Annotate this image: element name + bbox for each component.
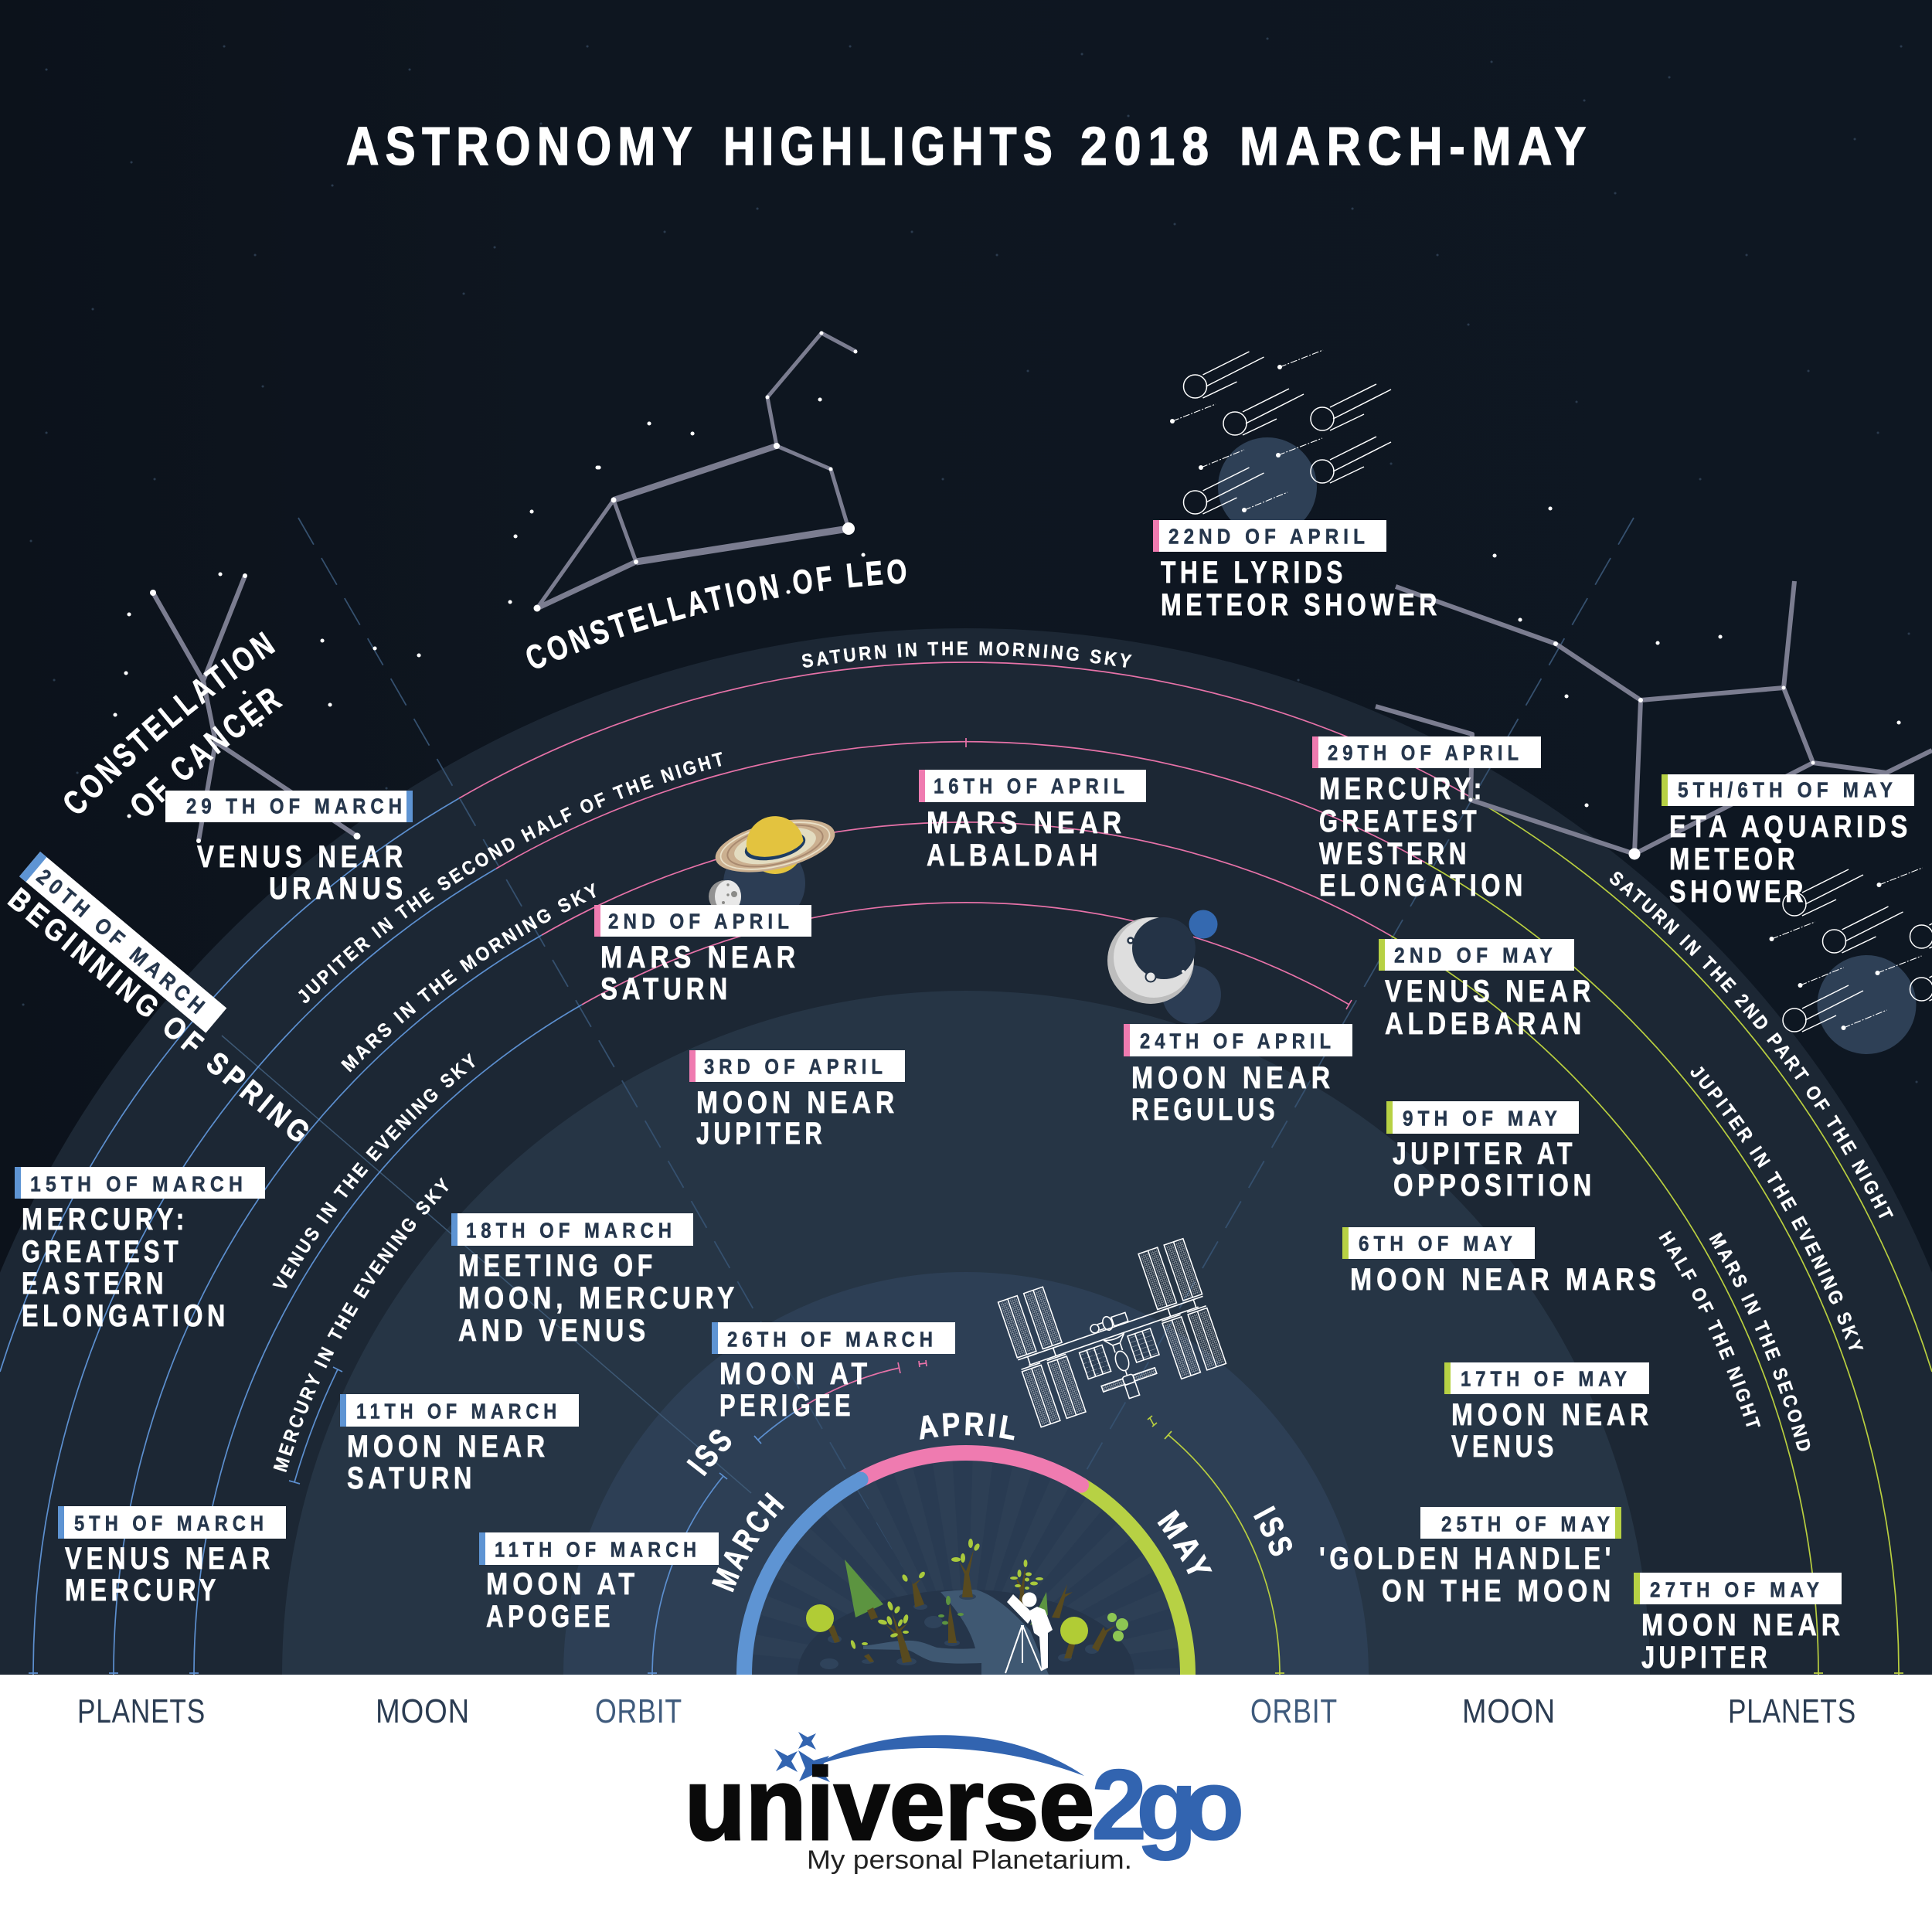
event: 25 May Golden Handle: ON THE MOON — [1382, 1574, 1615, 1608]
April segment — [861, 1453, 1081, 1485]
event: 9 May Jupiter at opposition: OPPOSITION — [1393, 1168, 1596, 1202]
legend: orbit categories: PLANETS — [1728, 1692, 1856, 1730]
white footer panel — [0, 1675, 1932, 1932]
sky rays — [859, 1568, 1073, 1675]
event: 15 March Mercury elongation: GREATEST — [22, 1235, 182, 1269]
event: 24 April Moon near Regulus: 24TH OF APRIL — [1140, 1029, 1335, 1053]
event: 17 May Moon near Venus — [1444, 1362, 1653, 1464]
legend: orbit categories — [77, 1692, 1856, 1730]
icon: International Space Station — [998, 1239, 1226, 1429]
radial dashed season lines — [298, 518, 1634, 1567]
round tree and berry tree — [1060, 1617, 1088, 1645]
curved planet visibility labels: JUPITER IN THE SECOND HALF OF THE NIGHT — [298, 751, 722, 1003]
event: 27 May Moon near Jupiter: MOON NEAR — [1641, 1608, 1845, 1642]
event: 2 May Venus near Aldebaran: 2ND OF MAY — [1394, 943, 1557, 968]
event: 9 May Jupiter at opposition: JUPITER AT — [1393, 1137, 1577, 1171]
event: 3 April Moon near Jupiter: 3RD OF APRIL — [704, 1054, 887, 1079]
event: 3 April Moon near Jupiter: MOON NEAR — [696, 1086, 899, 1120]
logo: universe2go — [685, 1732, 1244, 1875]
title: 2018 — [1080, 116, 1216, 176]
event: 15 March Mercury elongation: EASTERN — [22, 1267, 168, 1301]
radial line: beginning of spring — [222, 1036, 751, 1493]
event: 29 April Mercury western elongation: ELONGATION — [1319, 869, 1527, 903]
event: 11 March Moon near Saturn: 11TH OF MARCH — [356, 1399, 561, 1423]
month labels — [711, 1413, 1213, 1592]
event: 26 March Moon at perigee — [712, 1322, 955, 1423]
event: 3 April Moon near Jupiter — [689, 1050, 905, 1151]
central modules — [1104, 1333, 1138, 1379]
event: 5/6 May Eta Aquarids — [1662, 774, 1914, 909]
event: 15 March Mercury elongation — [15, 1167, 265, 1333]
event: 2 May Venus near Aldebaran: VENUS NEAR — [1385, 975, 1595, 1009]
event: 2 May Venus near Aldebaran: ALDEBARAN — [1385, 1007, 1586, 1041]
month arc — [744, 1453, 1188, 1675]
event: 24 April Moon near Regulus — [1124, 1024, 1352, 1127]
hill — [798, 1590, 1134, 1675]
event: 11 March Moon near Saturn: SATURN — [347, 1461, 476, 1495]
constellation of Leo — [533, 331, 858, 612]
event: 29 March Venus near Uranus: 29 TH OF MARCH — [186, 794, 406, 818]
event: 6 May Moon near Mars — [1342, 1227, 1661, 1297]
curved planet visibility labels: MARS IN THE MORNING SKY — [341, 883, 596, 1073]
legend: orbit categories: ORBIT — [595, 1692, 682, 1730]
curved planet visibility labels: JUPITER IN THE EVENING SKY — [1691, 1066, 1864, 1349]
event: 22 April Lyrids: 22ND OF APRIL — [1168, 524, 1369, 549]
event: 26 March Moon at perigee: MOON AT — [719, 1357, 872, 1391]
event: 29 March Venus near Uranus — [165, 791, 413, 906]
event: 6 May Moon near Mars: MOON NEAR MARS — [1350, 1263, 1661, 1297]
icon: Saturn with the Moon — [709, 810, 840, 924]
beginning of spring banner: BEGINNING OF SPRING — [2, 882, 319, 1153]
event: 24 April Moon near Regulus: REGULUS — [1131, 1093, 1279, 1127]
month labels: APRIL — [920, 1413, 1015, 1440]
event: 15 March Mercury elongation: 15TH OF MARCH — [30, 1172, 247, 1196]
river — [863, 1590, 1049, 1675]
event: 16 April Mars near Albaldah: ALBALDAH — [927, 838, 1102, 872]
event: 26 March Moon at perigee: 26TH OF MARCH — [727, 1328, 937, 1351]
curved planet visibility labels: HALF OF THE NIGHT — [1658, 1230, 1760, 1427]
truss — [1026, 1299, 1199, 1366]
curved planet visibility labels: MERCURY IN THE EVENING SKY — [274, 1177, 448, 1472]
event: 5 March Venus near Mercury: 5TH OF MARCH — [74, 1512, 268, 1535]
constellation labels: OF CANCER — [131, 689, 283, 816]
event: 11 March Moon at apogee: APOGEE — [486, 1600, 614, 1634]
event: 9 May Jupiter at opposition — [1386, 1101, 1596, 1202]
legend: orbit categories: MOON — [1462, 1692, 1556, 1730]
title: HIGHLIGHTS — [723, 116, 1059, 176]
event: 29 April Mercury western elongation — [1312, 736, 1541, 903]
month labels: MARCH — [711, 1492, 784, 1592]
icon: Moon near Regulus — [1107, 910, 1221, 1024]
event: 16 April Mars near Albaldah: 16TH OF APRIL — [934, 774, 1129, 798]
event: 5/6 May Eta Aquarids: 5TH/6TH OF MAY — [1678, 777, 1897, 802]
ISS orbit labels: ISS — [1253, 1505, 1292, 1556]
event: 6 May Moon near Mars: 6TH OF MAY — [1359, 1232, 1517, 1255]
event: 3 April Moon near Jupiter: JUPITER — [696, 1117, 826, 1151]
logo: universe2go: universe — [685, 1747, 1094, 1861]
event: 29 April Mercury western elongation: MERCURY: — [1319, 772, 1486, 806]
icon: Lyrids meteor shower — [1170, 350, 1391, 536]
event: 22 April Lyrids: METEOR SHOWER — [1161, 588, 1441, 622]
ground shadows — [820, 1594, 1099, 1669]
logo: universe2go: 2go — [1091, 1748, 1244, 1861]
curved planet visibility labels: VENUS IN THE EVENING SKY — [272, 1053, 474, 1288]
curved planet visibility labels: SATURN IN THE 2ND PART OF THE NIGHT — [1610, 872, 1893, 1218]
event: 29 April Mercury western elongation: 29TH OF APRIL — [1328, 740, 1523, 765]
event: 18 March meeting: MEETING OF — [458, 1249, 657, 1283]
leaves — [850, 1539, 1043, 1649]
event: 11 March Moon at apogee — [479, 1532, 719, 1634]
constellation labels — [64, 560, 906, 816]
lime round tree — [828, 1625, 840, 1643]
title: ASTRONOMY — [346, 116, 699, 176]
planet orbit arcs: May, yellow — [1148, 798, 1932, 1675]
event: 15 March Mercury elongation: ELONGATION — [22, 1299, 230, 1333]
event: 18 March meeting: 18TH OF MARCH — [466, 1218, 676, 1243]
event: 5/6 May Eta Aquarids: METEOR — [1669, 842, 1799, 876]
event: 11 March Moon near Saturn: MOON NEAR — [347, 1430, 549, 1464]
event: 17 May Moon near Venus: 17TH OF MAY — [1461, 1366, 1631, 1391]
legend: orbit categories: PLANETS — [77, 1692, 206, 1730]
event: 11 March Moon near Saturn — [340, 1394, 579, 1495]
event: 2 April Mars near Saturn: SATURN — [600, 972, 732, 1006]
event: 26 March Moon at perigee: PERIGEE — [719, 1389, 855, 1423]
event: 22 April Lyrids: THE LYRIDS — [1161, 556, 1347, 590]
lower truss — [1101, 1368, 1157, 1392]
event: 16 April Mars near Albaldah — [919, 770, 1146, 872]
solar panels — [1138, 1247, 1177, 1311]
event: 15 March Mercury elongation: MERCURY: — [22, 1202, 189, 1236]
astronomer with telescope — [1005, 1592, 1053, 1673]
event: 22 April Lyrids — [1153, 520, 1441, 622]
upper modules — [1090, 1323, 1100, 1334]
event: 2 April Mars near Saturn: MARS NEAR — [600, 940, 800, 975]
logo: universe2go: My personal Planetarium. — [807, 1845, 1132, 1875]
planet orbit arcs: April, pink — [459, 662, 1471, 1411]
constellation of Cancer — [150, 573, 360, 843]
event: 17 May Moon near Venus: VENUS — [1451, 1430, 1558, 1464]
May segment — [1081, 1485, 1188, 1675]
event: 29 March Venus near Uranus: URANUS — [269, 872, 407, 906]
title: MARCH-MAY — [1240, 116, 1593, 176]
event: 27 May Moon near Jupiter — [1634, 1573, 1845, 1675]
curved planet visibility labels — [272, 641, 1893, 1472]
sky dome rings — [0, 628, 1932, 1675]
event: 25 May Golden Handle: 25TH OF MAY — [1441, 1512, 1614, 1536]
curved planet visibility labels: SATURN IN THE MORNING SKY — [802, 641, 1132, 668]
month labels: MAY — [1158, 1509, 1213, 1575]
title — [346, 116, 1593, 176]
event: 25 May Golden Handle — [1319, 1507, 1621, 1608]
event: 18 March meeting: AND VENUS — [458, 1314, 650, 1348]
event: 5 March Venus near Mercury: VENUS NEAR — [65, 1542, 274, 1576]
ISS orbit labels — [686, 1430, 1292, 1556]
March segment — [744, 1479, 861, 1675]
ground scene inside the month arc — [798, 1539, 1134, 1675]
constellation on the right — [1376, 581, 1932, 859]
small radiators — [1080, 1345, 1111, 1379]
constellation labels: CONSTELLATION OF LEO — [526, 560, 906, 668]
event: 29 April Mercury western elongation: GREATEST — [1319, 804, 1481, 838]
pine tree — [845, 1560, 883, 1617]
event: 29 March Venus near Uranus: VENUS NEAR — [197, 840, 407, 874]
event: 5/6 May Eta Aquarids: SHOWER — [1669, 875, 1808, 909]
event: 11 March Moon at apogee: 11TH OF MARCH — [495, 1538, 701, 1561]
ISS orbit labels: ISS — [686, 1430, 731, 1476]
beginning of spring banner: 20TH OF MARCH — [32, 865, 213, 1022]
event: 11 March Moon at apogee: MOON AT — [486, 1567, 639, 1601]
logo stars — [774, 1732, 830, 1782]
logo swoosh — [813, 1735, 1084, 1776]
event: 18 March meeting — [451, 1213, 739, 1348]
event: 9 May Jupiter at opposition: 9TH OF MAY — [1403, 1107, 1562, 1130]
event: 29 April Mercury western elongation: WESTERN — [1319, 837, 1471, 871]
event: 27 May Moon near Jupiter: JUPITER — [1641, 1641, 1771, 1675]
event: 17 May Moon near Venus: MOON NEAR — [1451, 1398, 1653, 1432]
beginning of spring banner — [2, 852, 319, 1153]
legend: orbit categories: MOON — [376, 1692, 470, 1730]
legend: orbit categories: ORBIT — [1250, 1692, 1338, 1730]
event: 2 May Venus near Aldebaran — [1379, 939, 1595, 1041]
constellation labels: CONSTELLATION — [64, 631, 275, 813]
planet orbit arcs: March, blue — [0, 798, 796, 1675]
event: 5 March Venus near Mercury: MERCURY — [65, 1573, 220, 1607]
event: 24 April Moon near Regulus: MOON NEAR — [1131, 1061, 1335, 1095]
event: 2 April Mars near Saturn — [594, 905, 811, 1006]
event: 18 March meeting: MOON, MERCURY — [458, 1281, 739, 1315]
bright stars — [115, 400, 1899, 816]
icon: Eta Aquarids meteor shower — [1770, 868, 1932, 1054]
event: 5 March Venus near Mercury — [58, 1506, 286, 1607]
sapling group — [864, 1549, 1116, 1663]
event: 27 May Moon near Jupiter: 27TH OF MAY — [1650, 1578, 1824, 1601]
curved planet visibility labels: MARS IN THE SECOND — [1709, 1232, 1810, 1451]
event: 2 April Mars near Saturn: 2ND OF APRIL — [608, 909, 794, 934]
event: 16 April Mars near Albaldah: MARS NEAR — [927, 806, 1126, 840]
event: 25 May Golden Handle: 'GOLDEN HANDLE' — [1319, 1542, 1615, 1576]
